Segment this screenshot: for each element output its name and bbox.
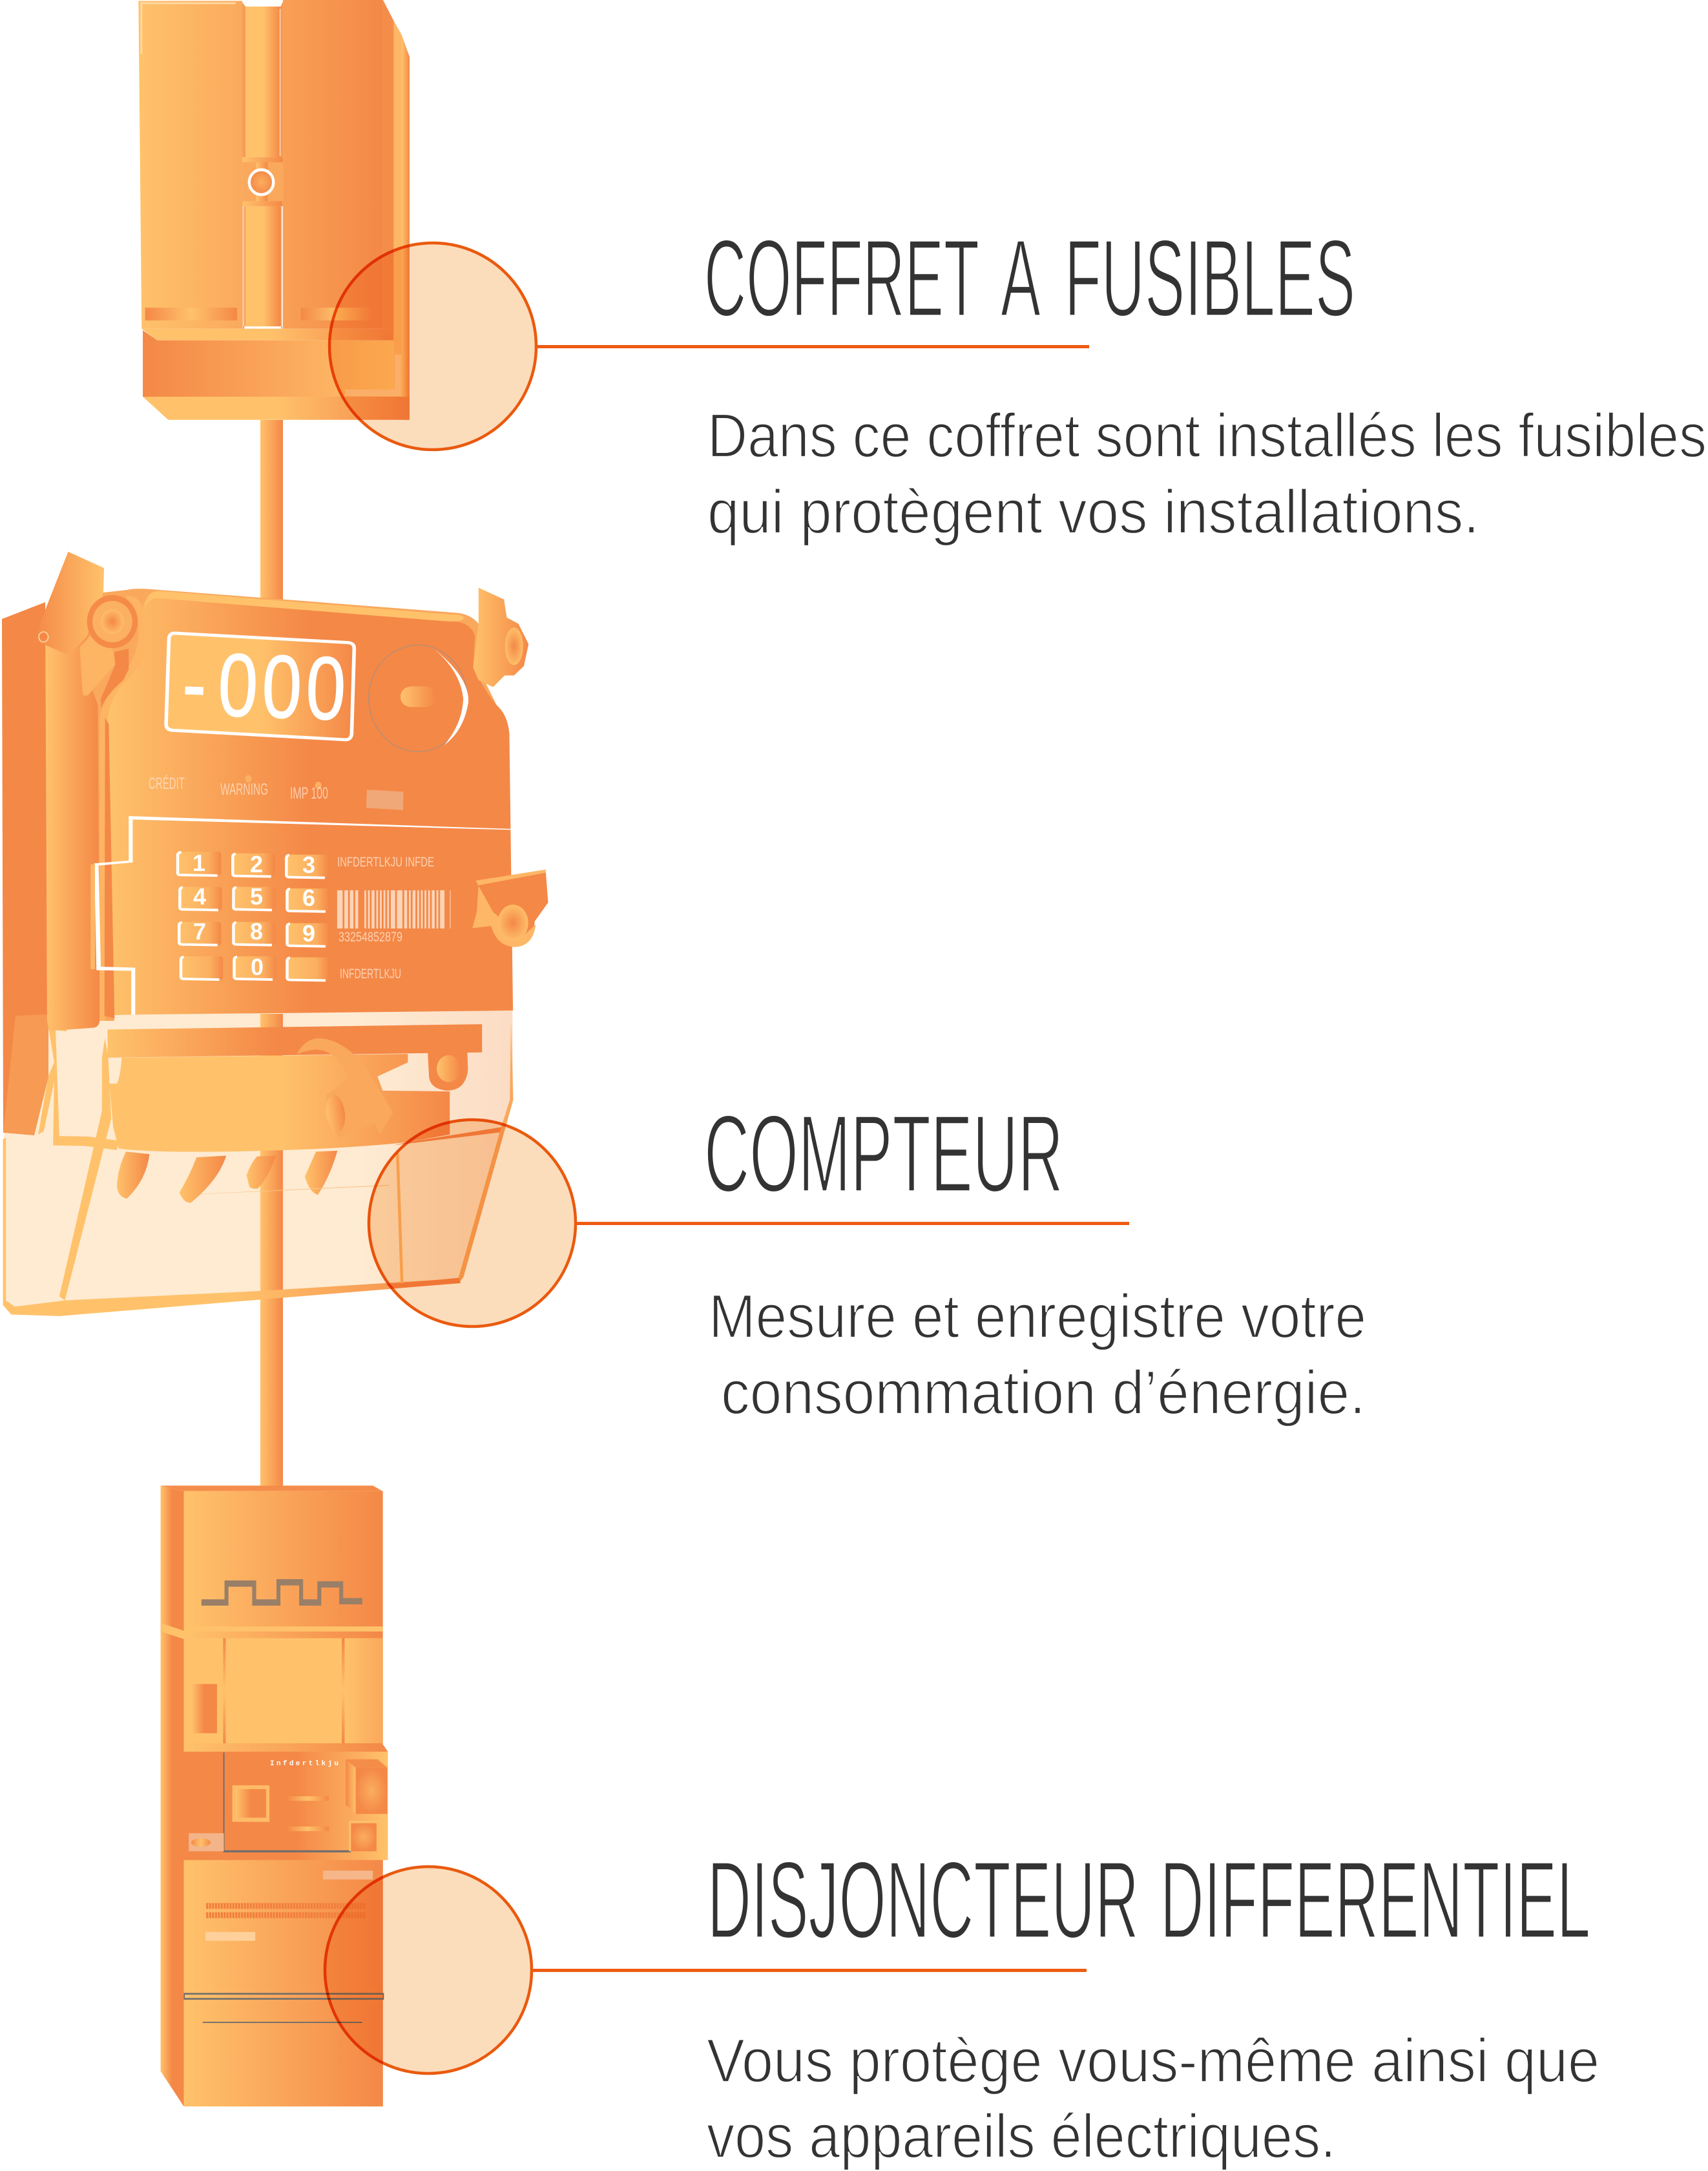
handle bbox=[34, 552, 104, 655]
bracket highlight bbox=[472, 870, 546, 947]
module square inner bbox=[236, 1789, 266, 1818]
pot body bbox=[109, 1054, 450, 1152]
callout line: fuse box bbox=[536, 345, 1089, 348]
panel divider right bbox=[342, 1638, 344, 1743]
barcode bbox=[337, 870, 451, 949]
left strip bbox=[38, 1061, 55, 1135]
connecting rod: top bbox=[260, 420, 283, 604]
fuse box light strip bbox=[393, 21, 402, 397]
text: breaker description: vos appareils électriques. bbox=[707, 2102, 1336, 2171]
cover fill bbox=[3, 1011, 513, 1316]
keypad digits: 5 bbox=[250, 883, 263, 910]
keypad digits: 8 bbox=[250, 918, 263, 945]
side band bbox=[161, 1623, 183, 1639]
keys bbox=[178, 852, 329, 981]
rod seen through cover bbox=[260, 1014, 283, 1484]
handle hole bbox=[39, 632, 48, 642]
upper band bbox=[242, 157, 283, 162]
module top bbox=[183, 1743, 388, 1752]
bottom section bbox=[183, 1860, 383, 2106]
gray line bbox=[203, 2021, 362, 2023]
housing lower tint bbox=[3, 1014, 48, 1135]
keypad panel outline bbox=[94, 816, 511, 1014]
gray slot bbox=[184, 1994, 384, 1999]
outer rim bbox=[79, 589, 497, 1021]
diagonal brace bbox=[59, 1038, 111, 1301]
meter transparent cover and lower mechanism bbox=[3, 1011, 513, 1484]
right cover edge bbox=[458, 1022, 513, 1282]
pill holder bbox=[189, 1833, 224, 1851]
box top bbox=[346, 1759, 388, 1768]
barcode number: 33254852879 bbox=[338, 930, 402, 945]
lock ring bbox=[249, 170, 273, 194]
small box border bbox=[349, 1821, 377, 1851]
module bar 2 bbox=[287, 1827, 329, 1831]
dial crescent bbox=[433, 648, 468, 745]
label plate left bbox=[205, 1932, 255, 1941]
meter illustration bbox=[2, 552, 548, 1484]
fuse box door edge bbox=[383, 0, 393, 341]
side bbox=[161, 1485, 183, 2106]
text: fuse box description bbox=[707, 401, 1707, 547]
dial pill bbox=[401, 686, 436, 707]
separator band dark bbox=[183, 1631, 382, 1639]
module bar 1 bbox=[287, 1796, 329, 1801]
door panel around lock bbox=[242, 157, 283, 206]
heading: fuse box: A bbox=[1001, 217, 1041, 340]
small box bbox=[351, 1823, 377, 1851]
pill bbox=[191, 1838, 211, 1847]
column white base bbox=[244, 326, 281, 329]
center column bottom bbox=[245, 206, 280, 326]
keypad digits: 3 bbox=[302, 852, 315, 878]
fuse box right door bbox=[283, 0, 383, 329]
square wave bbox=[202, 1582, 362, 1602]
hinge ring bbox=[87, 595, 138, 648]
keypad digits: 7 bbox=[193, 918, 206, 945]
pin 2 bbox=[180, 1156, 226, 1202]
column thin light lines bbox=[244, 9, 282, 326]
module caption: Infdertlkju bbox=[270, 1760, 338, 1768]
callout circle: breaker bbox=[325, 1867, 532, 2073]
module gray outline bbox=[224, 1752, 351, 1851]
latch stem bbox=[256, 162, 267, 201]
face rim stripe bbox=[99, 596, 144, 1021]
bar right bbox=[301, 308, 373, 320]
dial circle bbox=[369, 645, 467, 751]
inner L highlight bbox=[345, 355, 401, 396]
LCD reading: -000 bbox=[181, 634, 348, 739]
lower band bbox=[243, 201, 282, 206]
display panel bbox=[183, 1638, 383, 1743]
text: meter description bbox=[709, 1282, 1366, 1427]
text: meter description: Mesure et enregistre votre bbox=[709, 1282, 1366, 1351]
keypad digits bbox=[193, 850, 315, 980]
small rectangle bbox=[191, 1684, 217, 1733]
connecting rod: bottom bbox=[260, 1014, 283, 1489]
right lower bracket bbox=[472, 870, 548, 947]
hinge disc bbox=[92, 601, 132, 642]
label WARNING: WARNING bbox=[220, 781, 268, 799]
panel divider left bbox=[223, 1638, 225, 1743]
vertical cover edge bbox=[396, 1153, 404, 1284]
center column bottom edges bbox=[243, 206, 282, 329]
keypad digits: 1 bbox=[193, 850, 205, 876]
bar left bbox=[145, 308, 237, 320]
LED credit bbox=[169, 772, 176, 779]
meter label top: INFDERTLKJU INFDE bbox=[337, 855, 434, 870]
right upper bracket eye bbox=[505, 627, 523, 665]
center column top edges bbox=[242, 1, 283, 157]
meter left housing bbox=[2, 602, 48, 1135]
fuse box outer strip bbox=[402, 35, 410, 420]
band to circle bbox=[393, 1127, 501, 1146]
hook bbox=[79, 636, 115, 696]
top strip bbox=[161, 1485, 382, 1491]
pin 3 bbox=[247, 1156, 276, 1189]
right lug eye bbox=[437, 1055, 461, 1082]
hinge center bbox=[101, 609, 124, 634]
text: breaker description: Vous protège vous-même ainsi que bbox=[707, 2026, 1599, 2095]
keypad digits: 2 bbox=[250, 851, 263, 877]
shelf top bbox=[141, 329, 393, 341]
thin line bbox=[200, 1185, 390, 1194]
pin 1 bbox=[117, 1151, 149, 1199]
small grey rectangle bbox=[366, 790, 404, 810]
LED warning bbox=[245, 775, 251, 782]
box front bbox=[356, 1768, 388, 1814]
face top highlight bbox=[144, 591, 464, 622]
face bbox=[107, 598, 513, 1015]
door highlight bbox=[140, 3, 236, 54]
bottom wedge bbox=[143, 397, 410, 420]
label IMP: IMP 100 bbox=[290, 784, 328, 802]
keypad digits: 9 bbox=[302, 920, 315, 947]
lower right corner bbox=[386, 1278, 461, 1288]
bracket eye bbox=[498, 905, 528, 941]
label CREDIT: CRÉDIT bbox=[149, 774, 185, 793]
fuse box left door bbox=[138, 1, 242, 329]
heading: fuse box: FUSIBLES bbox=[1065, 217, 1355, 340]
callout circle: fuse box bbox=[329, 243, 536, 450]
pin 4 bbox=[305, 1151, 337, 1195]
right upper bracket bbox=[473, 588, 528, 687]
left bracket line bbox=[48, 1025, 119, 1150]
cover inner face bottom bbox=[3, 1138, 461, 1316]
front bbox=[183, 1491, 383, 2106]
fuse box illustration bbox=[138, 0, 410, 420]
meter front group bbox=[34, 552, 548, 1031]
lever eye bbox=[324, 1094, 347, 1133]
keypad digits: 4 bbox=[193, 883, 206, 910]
dark inner stripe bbox=[101, 649, 129, 708]
shelf front bbox=[143, 330, 393, 397]
callout line: breaker bbox=[532, 1969, 1087, 1972]
text: fuse box description: qui protègent vos installations. bbox=[707, 477, 1479, 547]
center column top bbox=[245, 6, 280, 157]
meter label bottom: INFDERTLKJU bbox=[340, 967, 401, 981]
text: breaker description bbox=[707, 2026, 1599, 2171]
keypad panel left tab bbox=[90, 865, 95, 969]
callout circle: meter bbox=[369, 1120, 576, 1327]
left column bbox=[45, 624, 99, 1031]
heading: breaker: DISJONCTEUR bbox=[707, 1839, 1139, 1962]
box side bbox=[346, 1759, 356, 1814]
callout line: meter bbox=[576, 1222, 1129, 1225]
LCD frame bbox=[166, 633, 354, 740]
module square bbox=[233, 1785, 269, 1822]
right lug bbox=[428, 1047, 468, 1091]
keypad digits: 6 bbox=[302, 885, 315, 911]
heading: meter: COMPTEUR bbox=[704, 1093, 1063, 1215]
keypad digits: 0 bbox=[251, 954, 264, 980]
separator band bbox=[183, 1626, 383, 1631]
text: meter description: consommation d’énergie. bbox=[721, 1358, 1366, 1427]
dotted rows bbox=[206, 1906, 366, 1915]
top bar bbox=[107, 1024, 482, 1058]
panel right shade bbox=[344, 1638, 383, 1743]
heading: fuse box: COFFRET bbox=[704, 217, 979, 340]
lever bbox=[297, 1038, 393, 1138]
LED imp bbox=[315, 782, 322, 789]
module body bbox=[183, 1752, 388, 1860]
label plate right bbox=[323, 1871, 373, 1880]
circuit breaker illustration bbox=[161, 1485, 388, 2106]
lower column strips bbox=[105, 718, 114, 1018]
